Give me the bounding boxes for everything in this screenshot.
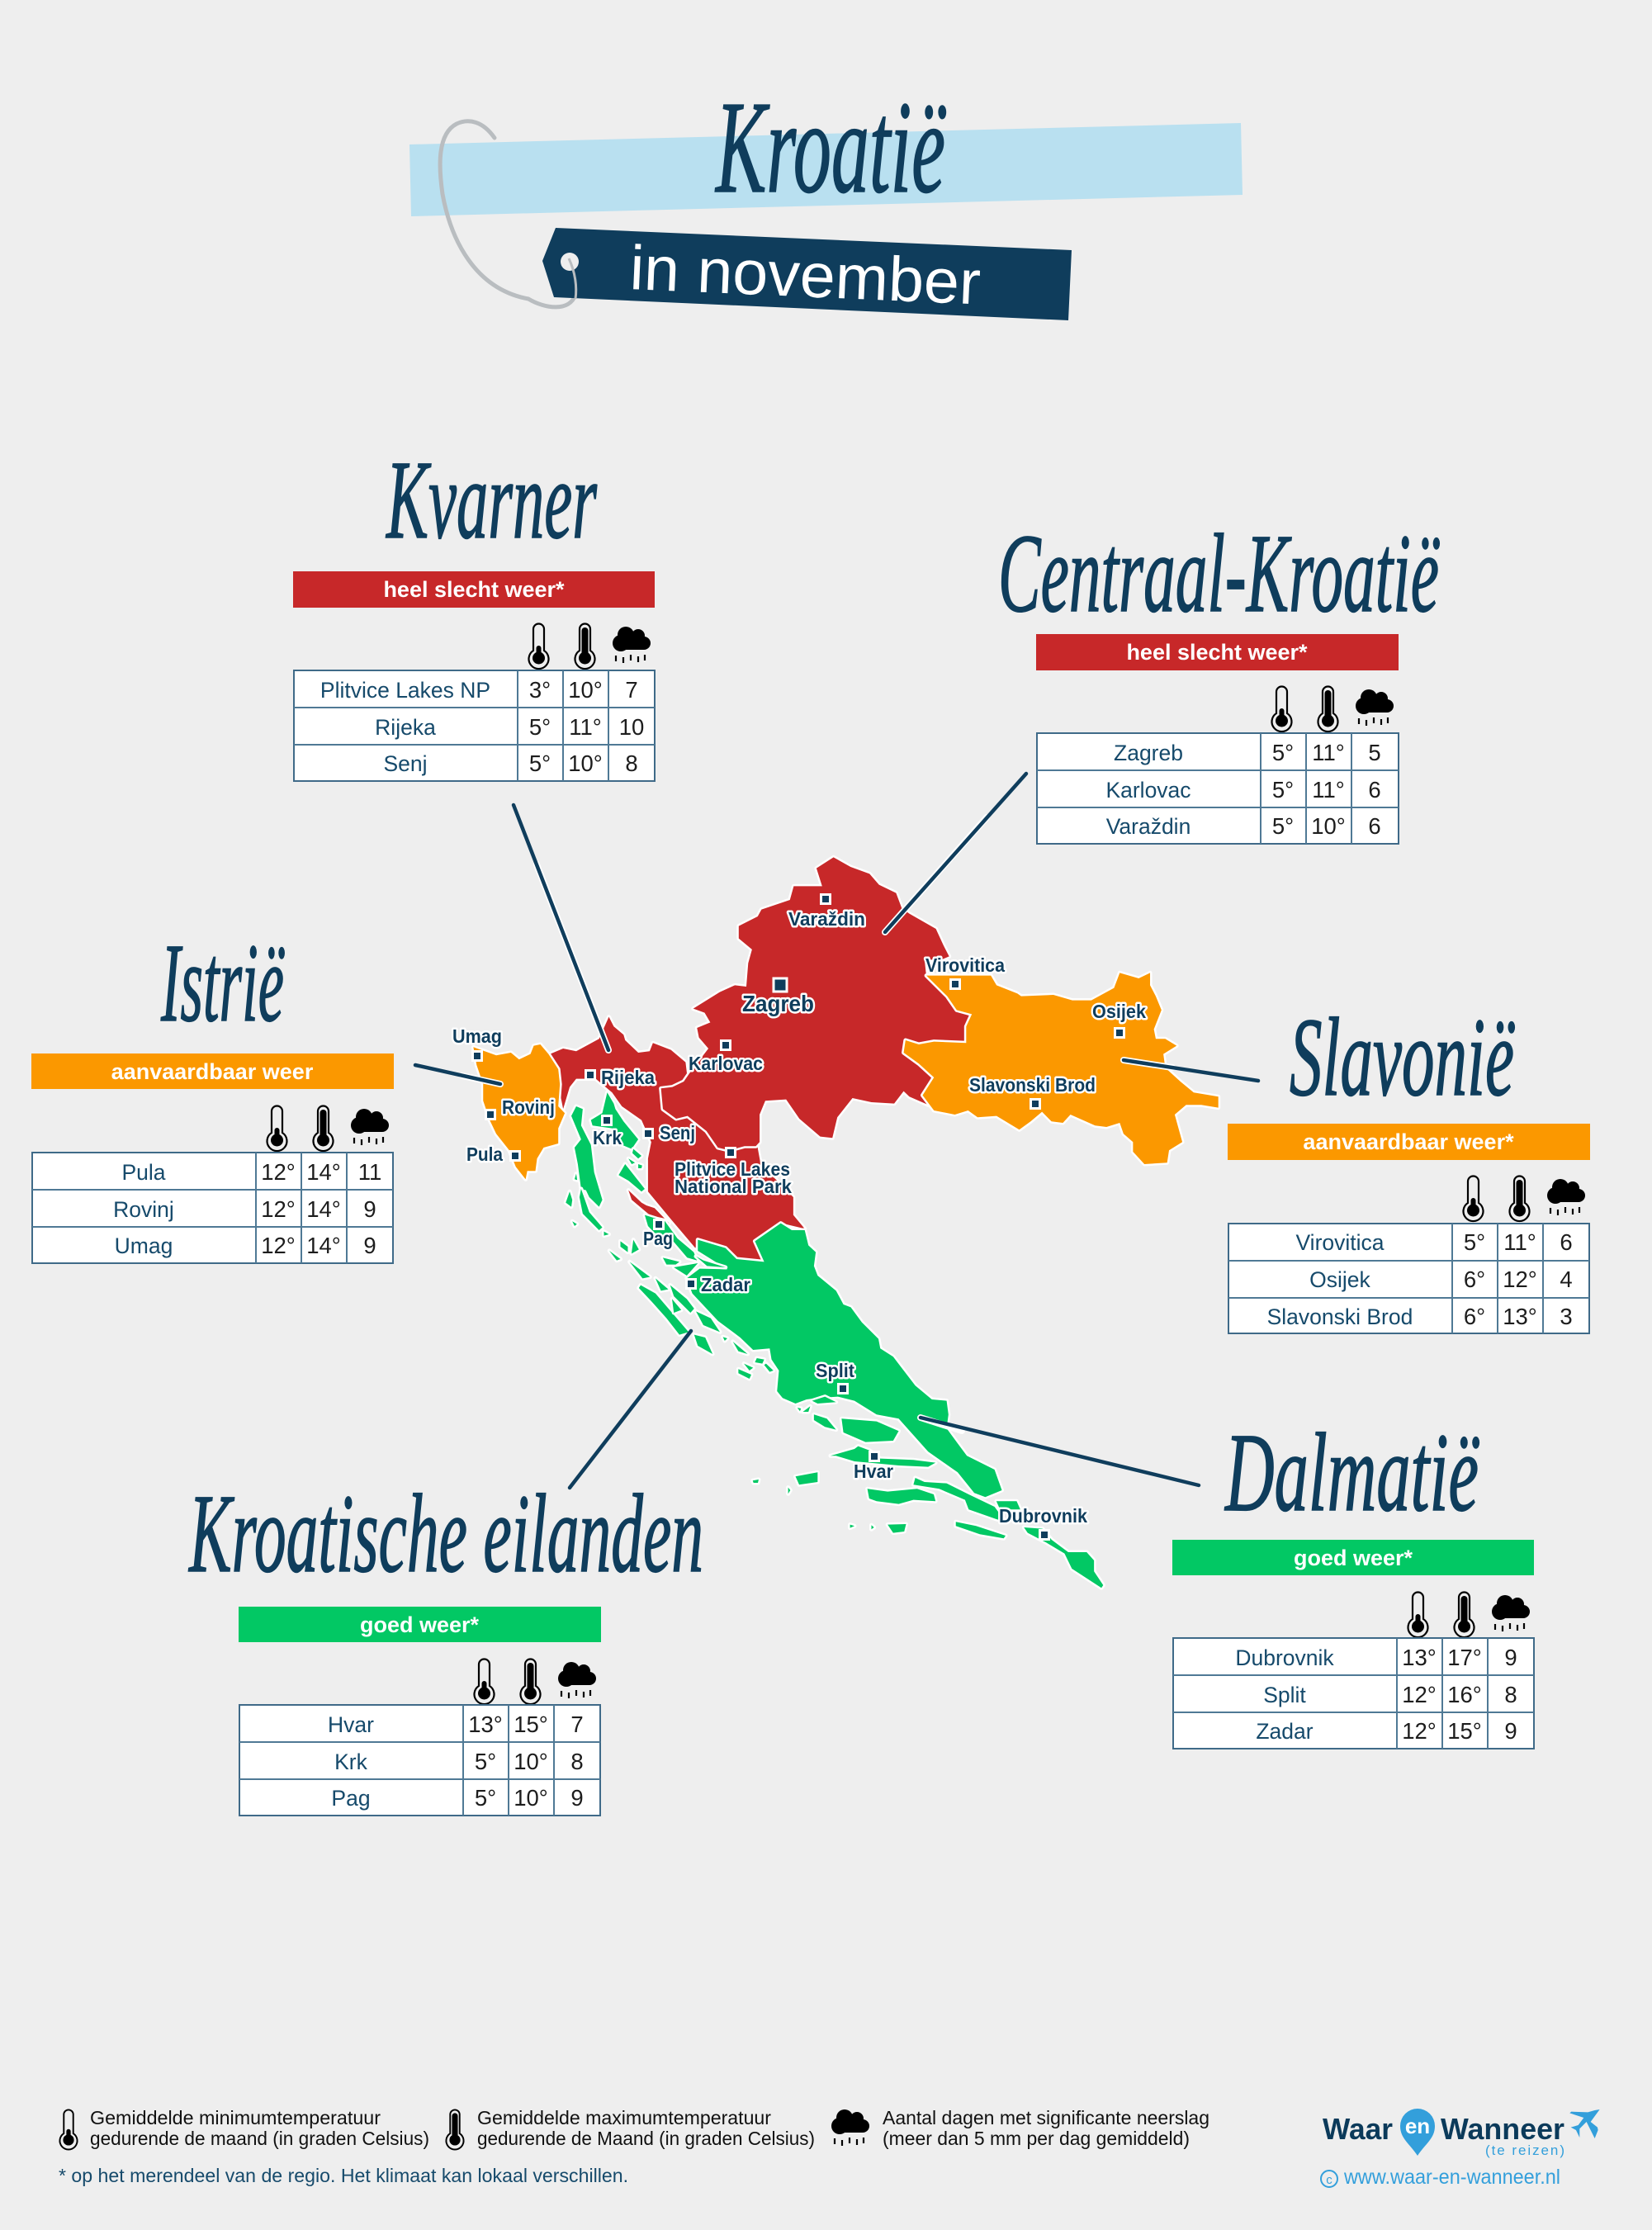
region: Slavonië — [904, 973, 1219, 1164]
legend text: rain: (meer dan 5 mm per dag gemiddeld) — [883, 2128, 1190, 2149]
title: Kroatië: Kroatië — [715, 73, 946, 220]
climate table: 8 — [625, 750, 638, 776]
city markers — [472, 895, 1124, 1539]
weather rating banner — [31, 1053, 394, 1089]
climate table: 10° — [568, 677, 603, 703]
climate table: Senj — [383, 751, 428, 776]
city labels: Rijeka — [601, 1067, 655, 1088]
city labels: Pula — [466, 1143, 503, 1165]
logo: Waar en Wanneer: Waar — [1323, 2112, 1393, 2146]
climate table: Karlovac — [1105, 778, 1191, 803]
tag hole — [561, 253, 579, 271]
legend text: maximum temperature: gedurende de Maand (in graden Celsius) — [477, 2128, 815, 2149]
climate table: Varaždin — [1106, 814, 1190, 839]
panel: Istrië — [31, 1053, 394, 1263]
weather rating banner — [1036, 634, 1399, 670]
legend — [59, 2107, 1209, 2186]
region: Kroatische eilanden (noord) — [566, 1092, 697, 1261]
city labels: Zadar — [701, 1274, 750, 1295]
climate table: 7 — [625, 677, 638, 703]
city labels: Varaždin — [788, 908, 865, 930]
city labels: Plitvice Lakes — [675, 1158, 790, 1180]
city labels: Umag — [452, 1025, 502, 1047]
climate table: 6 — [1560, 1229, 1573, 1255]
icon: maximum temperature — [446, 2109, 464, 2149]
climate table: 9 — [570, 1785, 584, 1811]
legend text: rain: Aantal dagen met significante neerslag — [883, 2107, 1209, 2128]
climate table: Pula — [121, 1160, 166, 1185]
city labels: Virovitica — [925, 954, 1005, 976]
city labels: Pag — [643, 1228, 673, 1249]
climate table: 5° — [475, 1785, 496, 1811]
city labels: Split — [816, 1360, 854, 1381]
city labels: Zagreb — [742, 991, 814, 1016]
climate table: 5° — [1272, 740, 1294, 765]
region: Centraal-Kroatië — [661, 857, 972, 1150]
climate table: Virovitica — [1295, 1230, 1385, 1255]
icons — [1463, 1176, 1585, 1221]
climate table: 5° — [529, 750, 551, 776]
climate table: 10° — [1311, 813, 1346, 839]
climate table — [32, 1153, 393, 1263]
weather rating banner: aanvaardbaar weer* — [1303, 1129, 1514, 1154]
icons — [1408, 1592, 1530, 1637]
climate table: 11° — [1503, 1229, 1536, 1255]
legend text: minimum temperature — [90, 2107, 429, 2149]
climate table: 11 — [358, 1159, 381, 1185]
copyright and website: c — [1326, 2173, 1332, 2187]
climate table: 4 — [1560, 1267, 1573, 1292]
climate table: 15° — [514, 1712, 548, 1737]
climate table: 14° — [306, 1196, 341, 1222]
climate table: 10 — [619, 714, 644, 740]
climate table: Slavonski Brod — [1267, 1304, 1413, 1329]
climate table: 11° — [1312, 740, 1345, 765]
climate table — [239, 1705, 600, 1816]
climate table — [1228, 1224, 1589, 1333]
climate table: 9 — [1504, 1718, 1517, 1744]
climate table: 9 — [1504, 1645, 1517, 1670]
weather rating banner: goed weer* — [360, 1612, 480, 1637]
icons — [1271, 687, 1394, 731]
climate table: 5° — [475, 1749, 496, 1774]
climate table: 5° — [1272, 777, 1294, 803]
climate table: Rijeka — [375, 715, 436, 740]
climate table: Krk — [334, 1749, 368, 1774]
weather rating banner — [1172, 1540, 1534, 1575]
climate table — [294, 670, 655, 781]
climate table: 16° — [1447, 1682, 1482, 1707]
icons — [528, 624, 651, 669]
map of Croatia — [472, 857, 1219, 1588]
climate table: Dubrovnik — [1235, 1645, 1334, 1670]
leader line: Dalmatië — [921, 1418, 1199, 1485]
title ribbon — [409, 123, 1243, 216]
climate table: Pag — [331, 1786, 371, 1811]
legend text: maximum temperature — [477, 2107, 815, 2149]
climate table — [1173, 1638, 1534, 1749]
climate table: 9 — [363, 1233, 376, 1258]
city labels: Dubrovnik — [999, 1505, 1087, 1527]
climate table: 3° — [529, 677, 551, 703]
climate table: 17° — [1447, 1645, 1482, 1670]
city labels: Rovinj — [502, 1096, 555, 1118]
climate table: 5° — [529, 714, 551, 740]
heading: Dalmatië: Dalmatië — [1224, 1411, 1479, 1535]
string over tag — [569, 258, 576, 299]
region: Dalmatië — [609, 1224, 1103, 1588]
icon: rain cloud — [831, 2109, 869, 2146]
weather rating banner — [239, 1607, 601, 1642]
legend text: minimum temperature: Gemiddelde minimumtemperatuur — [90, 2107, 381, 2128]
climate table: Osijek — [1309, 1267, 1371, 1292]
climate table: 5° — [1464, 1229, 1485, 1255]
logo: Waar en Wanneer: Wanneer — [1441, 2112, 1564, 2146]
panel: Kvarner — [293, 571, 655, 781]
weather rating banner — [293, 571, 655, 608]
city labels: Slavonski Brod — [969, 1074, 1096, 1096]
climate table: 13° — [1402, 1645, 1437, 1670]
climate table: 10° — [514, 1785, 548, 1811]
icon: minimum temperature — [59, 2109, 78, 2149]
panel: Slavonië — [1228, 1124, 1590, 1333]
legend text: minimum temperature: gedurende de maand (in graden Celsius) — [90, 2128, 429, 2149]
climate table: Split — [1263, 1683, 1306, 1707]
climate table: 15° — [1447, 1718, 1482, 1744]
climate table — [1037, 733, 1399, 844]
climate table: Rovinj — [113, 1197, 174, 1222]
climate table: 8 — [1504, 1682, 1517, 1707]
subtitle: in november — [628, 233, 982, 319]
icon: airplane — [1569, 2109, 1600, 2138]
icons — [267, 1106, 389, 1151]
climate table: Hvar — [328, 1712, 374, 1737]
city labels: Karlovac — [689, 1053, 763, 1074]
footnote: * op het merendeel van de regio. Het klimaat kan lokaal verschillen. — [59, 2165, 628, 2186]
climate table: 11° — [1312, 777, 1345, 803]
climate table: 12° — [1402, 1718, 1437, 1744]
climate table: 12° — [1402, 1682, 1437, 1707]
leader line: Istrië — [415, 1065, 500, 1084]
panel: Dalmatië — [1172, 1540, 1534, 1749]
icons — [474, 1659, 596, 1704]
climate table: 14° — [306, 1159, 341, 1185]
panel: Centraal-Kroatië — [1036, 634, 1399, 844]
climate table: 6° — [1464, 1304, 1485, 1329]
city labels — [452, 908, 1146, 1527]
leader line: Kroatische eilanden — [570, 1331, 691, 1488]
climate table: 10° — [568, 750, 603, 776]
weather rating banner — [1228, 1124, 1590, 1160]
heading: Kroatische eilanden: Kroatische eilanden — [188, 1472, 703, 1596]
weather rating banner: goed weer* — [1294, 1546, 1413, 1570]
legend text: rain — [883, 2107, 1209, 2149]
climate table: 8 — [570, 1749, 584, 1774]
climate table: 3 — [1560, 1304, 1573, 1329]
city labels: Hvar — [854, 1461, 893, 1482]
climate table: 13° — [468, 1712, 503, 1737]
climate table: 12° — [1503, 1267, 1537, 1292]
climate table: 9 — [363, 1196, 376, 1222]
weather rating banner: heel slecht weer* — [383, 577, 565, 602]
climate table: 10° — [514, 1749, 548, 1774]
icon: map pin: en — [1405, 2114, 1430, 2138]
logo: Waar en Wanneer — [1321, 2109, 1600, 2189]
climate table: 5 — [1368, 740, 1381, 765]
region: Istrië — [473, 1044, 565, 1179]
heading: Kvarner: Kvarner — [386, 438, 598, 562]
city labels: Senj — [660, 1122, 695, 1143]
region: Kvarner — [550, 1017, 805, 1263]
city labels: National Park — [675, 1176, 792, 1197]
climate table: 12° — [261, 1159, 296, 1185]
panel: Kroatische eilanden — [239, 1607, 601, 1816]
climate table: 6 — [1368, 777, 1381, 803]
city labels: Osijek — [1092, 1001, 1146, 1022]
climate table: Umag — [115, 1233, 173, 1258]
climate table: 13° — [1503, 1304, 1537, 1329]
luggage tag — [542, 228, 1072, 320]
climate table: Plitvice Lakes NP — [320, 678, 490, 703]
climate table: Zagreb — [1114, 741, 1183, 765]
climate table: Zadar — [1256, 1719, 1314, 1744]
climate table: 5° — [1272, 813, 1294, 839]
icon: map pin — [1400, 2109, 1435, 2156]
copyright and website: www.waar-en-wanneer.nl — [1343, 2166, 1560, 2189]
climate table: 14° — [306, 1233, 341, 1258]
leader line: Centraal-Kroatië — [885, 774, 1026, 932]
climate table: 12° — [261, 1196, 296, 1222]
climate table: 7 — [570, 1712, 584, 1737]
weather rating banner: heel slecht weer* — [1126, 640, 1308, 665]
city labels: Krk — [593, 1127, 622, 1148]
legend text: maximum temperature: Gemiddelde maximumtemperatuur — [477, 2107, 771, 2128]
climate table: 12° — [261, 1233, 296, 1258]
luggage tag string — [440, 121, 577, 307]
title block — [409, 73, 1243, 320]
leader line: Kvarner — [514, 805, 608, 1050]
logo: Waar en Wanneer: (te reizen) — [1485, 2142, 1564, 2158]
climate table: 6° — [1464, 1267, 1485, 1292]
climate table: 6 — [1368, 813, 1381, 839]
leader line: Slavonië — [1124, 1060, 1258, 1081]
weather rating banner: aanvaardbaar weer — [111, 1059, 314, 1084]
heading: Istrië: Istrië — [160, 921, 285, 1045]
climate table: 11° — [569, 714, 602, 740]
